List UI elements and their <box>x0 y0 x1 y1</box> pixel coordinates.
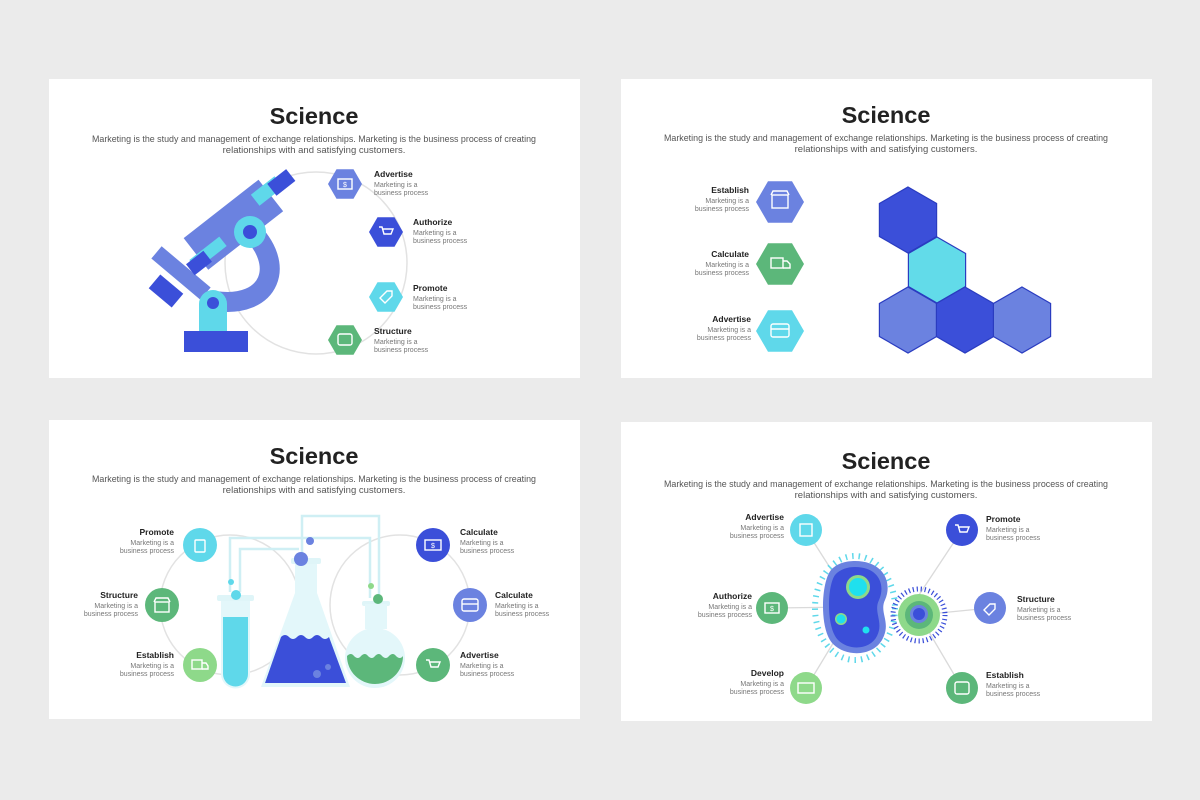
item: Advertise: Marketing is a <box>460 663 504 670</box>
item: Promote: Promote <box>986 514 1021 524</box>
title: Science <box>270 443 358 469</box>
subtitle: Marketing is the study and management of exchange relationships. Marketing is the business process of creating <box>92 474 536 485</box>
item: Develop: business process <box>730 689 784 696</box>
item: Promote <box>369 282 468 312</box>
panel: cell <box>621 422 1152 721</box>
item: Calculate 2 <box>453 588 550 622</box>
item: Establish: business process <box>986 691 1041 698</box>
item: Calculate: Calculate <box>711 249 749 259</box>
item: Structure: business process <box>374 347 429 354</box>
subtitle: Marketing is the study and management of exchange relationships. Marketing is the business process of creating <box>664 479 1108 490</box>
item: Authorize: Marketing is a <box>708 604 752 611</box>
item: Advertise: $ <box>343 182 347 189</box>
item: Promote <box>120 527 217 562</box>
item: Authorize: Authorize <box>713 591 752 601</box>
item: Advertise <box>328 169 429 199</box>
item: Establish: Marketing is a <box>130 663 174 670</box>
item: Advertise: business process <box>730 533 784 540</box>
item: Calculate 2: Marketing is a <box>495 603 539 610</box>
item: Advertise <box>416 648 515 682</box>
panel: honeycomb <box>621 79 1152 378</box>
item: Promote <box>946 514 1041 546</box>
item: Authorize: Marketing is a <box>413 230 457 237</box>
item: Advertise: Advertise <box>712 314 751 324</box>
item: Establish: Marketing is a <box>986 683 1030 690</box>
item: Authorize <box>698 591 788 624</box>
item: Calculate 2: business process <box>495 611 550 618</box>
panel: microscope <box>49 79 580 378</box>
item: Structure: Structure <box>100 590 138 600</box>
item: Promote: Marketing is a <box>413 296 457 303</box>
title: Science <box>842 448 930 474</box>
item: Establish: business process <box>120 671 174 678</box>
item: Advertise: business process <box>697 335 751 342</box>
item: Structure <box>328 325 429 355</box>
item: Structure: business process <box>1017 615 1072 622</box>
honeycomb chart <box>879 187 1051 353</box>
item: Establish <box>946 670 1041 704</box>
item: Calculate 2: Calculate <box>495 590 533 600</box>
item: Develop <box>730 668 822 704</box>
item: Authorize: business process <box>698 612 752 619</box>
item: Establish: business process <box>695 206 749 213</box>
item: Advertise <box>730 512 822 546</box>
item: Structure: Marketing is a <box>1017 607 1061 614</box>
item: Develop: Marketing is a <box>740 681 784 688</box>
subtitle: relationships with and satisfying customers. <box>795 490 977 501</box>
item: Calculate: Calculate <box>460 527 498 537</box>
item: Develop: Develop <box>751 668 784 678</box>
subtitle <box>664 133 1108 155</box>
cell illustration <box>815 556 945 660</box>
item: Promote: business process <box>413 304 468 311</box>
item: Promote: Promote <box>413 283 448 293</box>
flasks illustration <box>217 516 405 688</box>
item: Structure: Structure <box>1017 594 1055 604</box>
item: Advertise: Advertise <box>460 650 499 660</box>
item: Structure: Structure <box>374 326 412 336</box>
subtitle <box>92 134 536 156</box>
item: Establish: Establish <box>711 185 749 195</box>
item: Establish <box>120 648 217 682</box>
item: Advertise: Advertise <box>374 169 413 179</box>
item: Calculate: $ <box>431 543 435 550</box>
item: Calculate <box>416 527 515 562</box>
title: Science <box>842 102 930 128</box>
subtitle: Marketing is the study and management of exchange relationships. Marketing is the business process of creating <box>92 134 536 145</box>
panel: flasks <box>49 420 580 719</box>
item: Promote: Marketing is a <box>986 527 1030 534</box>
subtitle <box>664 479 1108 501</box>
item: Calculate: Marketing is a <box>705 262 749 269</box>
item: Establish: Establish <box>986 670 1024 680</box>
subtitle <box>92 474 536 496</box>
item: Advertise: Advertise <box>745 512 784 522</box>
item: Calculate: business process <box>460 548 515 555</box>
item: Establish: Establish <box>136 650 174 660</box>
item: Structure: Marketing is a <box>374 339 418 346</box>
microscope illustration <box>149 169 295 352</box>
item: Authorize: $ <box>770 606 774 613</box>
item: Establish <box>695 181 804 223</box>
item: Authorize: business process <box>413 238 468 245</box>
item: Establish: Marketing is a <box>705 198 749 205</box>
item: Advertise: business process <box>460 671 515 678</box>
item: Calculate: business process <box>695 270 749 277</box>
item: Calculate <box>695 243 804 285</box>
title: Science <box>270 103 358 129</box>
item: Advertise: Marketing is a <box>707 327 751 334</box>
item: Authorize <box>369 217 468 247</box>
item: Promote: Marketing is a <box>130 540 174 547</box>
item: Advertise: business process <box>374 190 429 197</box>
subtitle: relationships with and satisfying customers. <box>795 144 977 155</box>
subtitle: relationships with and satisfying customers. <box>223 485 405 496</box>
item: Structure: business process <box>84 611 138 618</box>
item: Promote: business process <box>986 535 1041 542</box>
item: Advertise: Marketing is a <box>740 525 784 532</box>
item: Calculate: Marketing is a <box>460 540 504 547</box>
item: Promote: business process <box>120 548 174 555</box>
item: Advertise: Marketing is a <box>374 182 418 189</box>
item: Structure <box>84 588 179 622</box>
item: Authorize: Authorize <box>413 217 452 227</box>
item: Structure: Marketing is a <box>94 603 138 610</box>
item: Advertise <box>697 310 804 352</box>
item: Promote: Promote <box>140 527 174 537</box>
subtitle: relationships with and satisfying customers. <box>223 145 405 156</box>
item: Structure <box>974 592 1072 624</box>
subtitle: Marketing is the study and management of exchange relationships. Marketing is the business process of creating <box>664 133 1108 144</box>
